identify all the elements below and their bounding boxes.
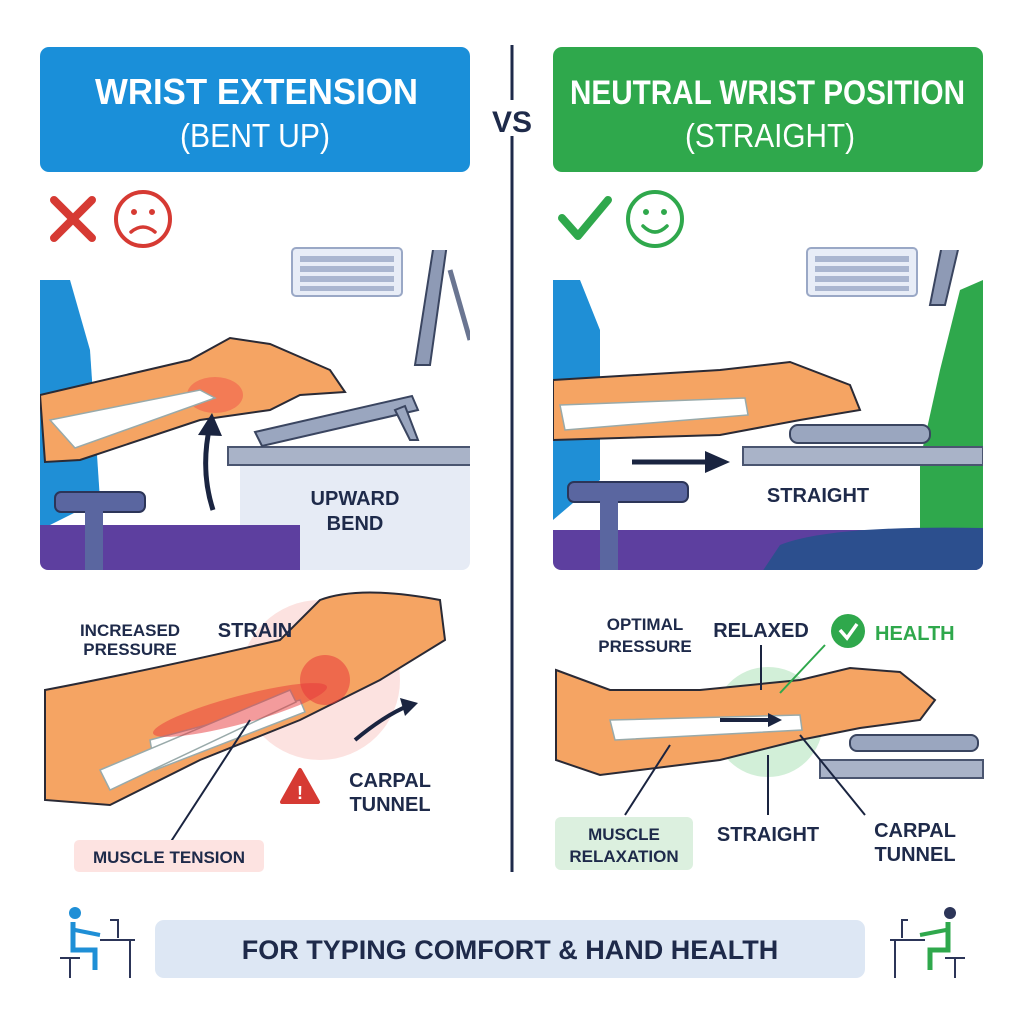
scene: straight wrist: [553, 247, 983, 570]
icon: red X and sad face: [54, 192, 170, 246]
label: straight: STRAIGHT: [767, 485, 869, 507]
diagram: bent wrist anatomy: PRESSURE: [83, 640, 177, 659]
diagram: bent wrist anatomy: [45, 592, 445, 872]
diagram: neutral wrist anatomy: OPTIMAL: [607, 615, 683, 634]
diagram: bent wrist anatomy: INCREASED: [80, 621, 180, 640]
header: neutral wrist: [553, 47, 983, 172]
diagram: neutral wrist anatomy: [555, 614, 983, 870]
header: wrist extension: (BENT UP): [180, 117, 330, 154]
footer banner: [155, 920, 865, 978]
diagram: neutral wrist anatomy: RELAXATION: [569, 847, 679, 866]
diagram: bent wrist anatomy: MUSCLE TENSION: [93, 848, 245, 867]
diagram: bent wrist anatomy: TUNNEL: [349, 794, 431, 816]
icon: person typing left: [60, 907, 135, 978]
diagram: neutral wrist anatomy: RELAXED: [713, 620, 809, 642]
diagram: bent wrist anatomy: !: [297, 783, 303, 803]
diagram: bent wrist anatomy: CARPAL: [349, 770, 431, 792]
scene: bent wrist: [40, 247, 470, 570]
header: wrist extension: WRIST EXTENSION: [95, 71, 418, 112]
diagram: neutral wrist anatomy: CARPAL: [874, 820, 956, 842]
diagram: neutral wrist anatomy: PRESSURE: [598, 637, 692, 656]
arrow: upward: [198, 413, 222, 510]
header: neutral wrist: NEUTRAL WRIST POSITION: [570, 74, 965, 112]
header: wrist extension: [40, 47, 470, 172]
diagram: neutral wrist anatomy: TUNNEL: [874, 844, 956, 866]
icon: person typing right: [890, 907, 965, 978]
diagram: bent wrist anatomy: STRAIN: [218, 620, 292, 642]
mini keyboard icon: [292, 248, 402, 296]
label: upward bend: BEND: [327, 513, 383, 535]
diagram: neutral wrist anatomy: STRAIGHT: [717, 824, 819, 846]
label: upward bend: [311, 488, 399, 535]
header: neutral wrist: (STRAIGHT): [685, 117, 855, 154]
footer banner: FOR TYPING COMFORT & HAND HEALTH: [242, 935, 778, 965]
diagram: neutral wrist anatomy: MUSCLE: [588, 825, 660, 844]
arrow: straight: [632, 451, 730, 473]
label: upward bend: UPWARD: [311, 488, 399, 510]
diagram: neutral wrist anatomy: HEALTH: [875, 623, 955, 645]
icon: green check and smile: [562, 192, 682, 246]
vs label: VS: [492, 106, 532, 139]
